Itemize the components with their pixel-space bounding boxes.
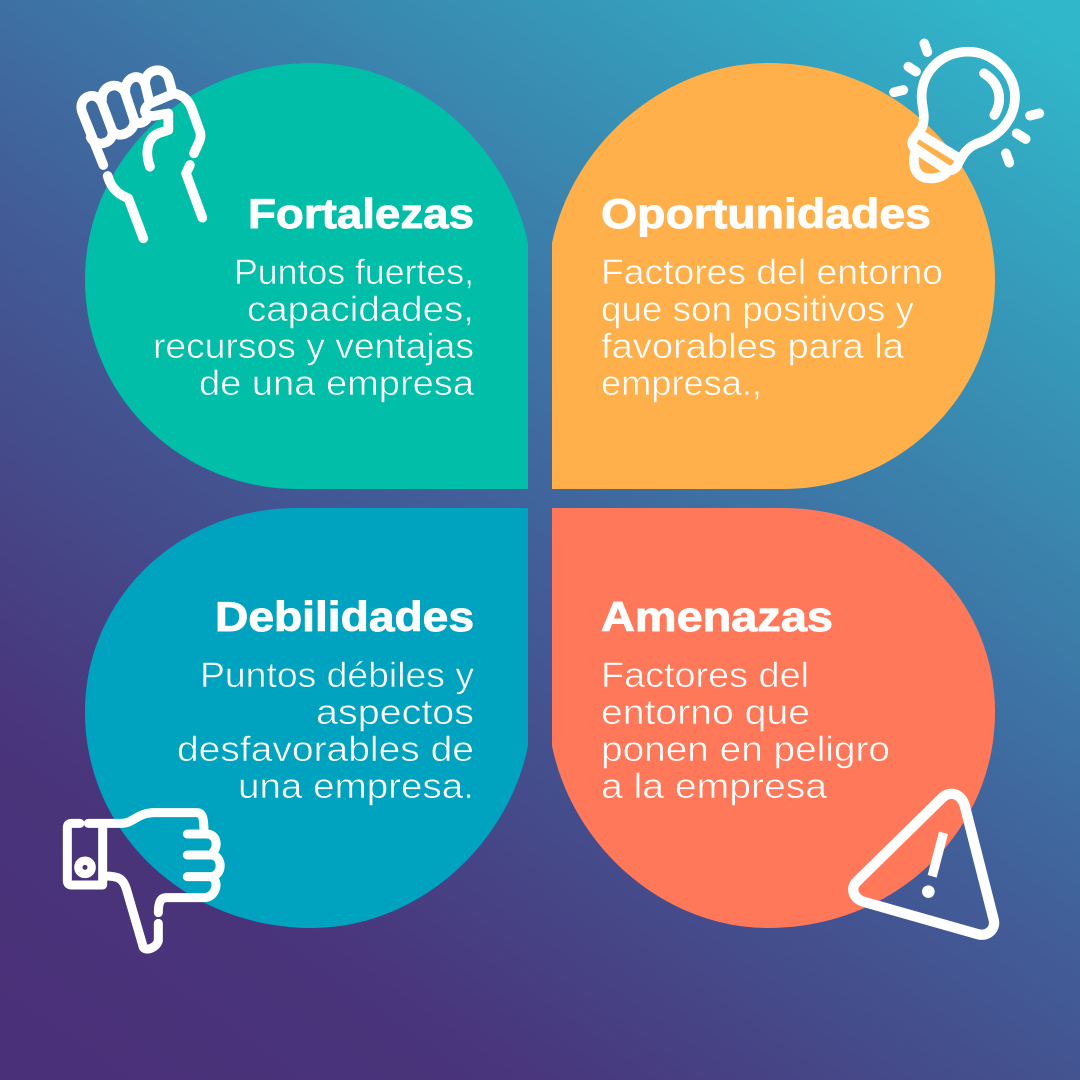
petal: Oportunidades <box>552 63 995 489</box>
text: Oportunidades description: que son positivos y <box>601 290 915 329</box>
heading: Fortalezas: Fortalezas <box>248 190 474 237</box>
icon: warning triangle <box>853 794 994 935</box>
panel: Fortalezas <box>85 63 528 489</box>
text: Amenazas description <box>601 656 890 806</box>
panel: Amenazas <box>552 508 995 928</box>
heading: Debilidades: Debilidades <box>215 593 474 640</box>
text: Amenazas description: ponen en peligro <box>601 730 890 769</box>
text: Fortalezas description: de una empresa <box>199 364 475 403</box>
heading: Oportunidades: Oportunidades <box>601 190 931 237</box>
text: Fortalezas description <box>153 253 475 403</box>
icon: light bulb <box>894 43 1039 178</box>
text: Fortalezas description: Puntos fuertes, <box>234 253 474 292</box>
text: Amenazas description: Factores del <box>601 656 809 695</box>
text: Debilidades description: una empresa. <box>238 767 474 806</box>
petal: Debilidades <box>85 508 528 928</box>
petal: Fortalezas <box>85 63 528 489</box>
text: Oportunidades description: favorables para la <box>601 327 905 366</box>
text: Oportunidades description: empresa., <box>601 364 762 403</box>
text: Debilidades description: Puntos débiles y <box>200 656 475 695</box>
text: Oportunidades description <box>601 253 943 403</box>
text: Debilidades description: desfavorables de <box>177 730 474 769</box>
icon: thumbs down <box>67 813 220 949</box>
text: Amenazas description: a la empresa <box>601 767 828 806</box>
text: Debilidades description: aspectos <box>316 693 474 732</box>
panel: Debilidades <box>85 508 528 928</box>
icon: raised fist <box>81 70 202 238</box>
text: Debilidades description <box>177 656 475 806</box>
text: Amenazas description: entorno que <box>601 693 810 732</box>
panel: Oportunidades <box>552 63 995 489</box>
text: Oportunidades description: Factores del entorno <box>601 253 943 292</box>
text: Fortalezas description: recursos y ventajas <box>153 327 474 366</box>
text: Fortalezas description: capacidades, <box>247 290 474 329</box>
petal: Amenazas <box>552 508 995 928</box>
heading: Amenazas: Amenazas <box>601 593 833 640</box>
